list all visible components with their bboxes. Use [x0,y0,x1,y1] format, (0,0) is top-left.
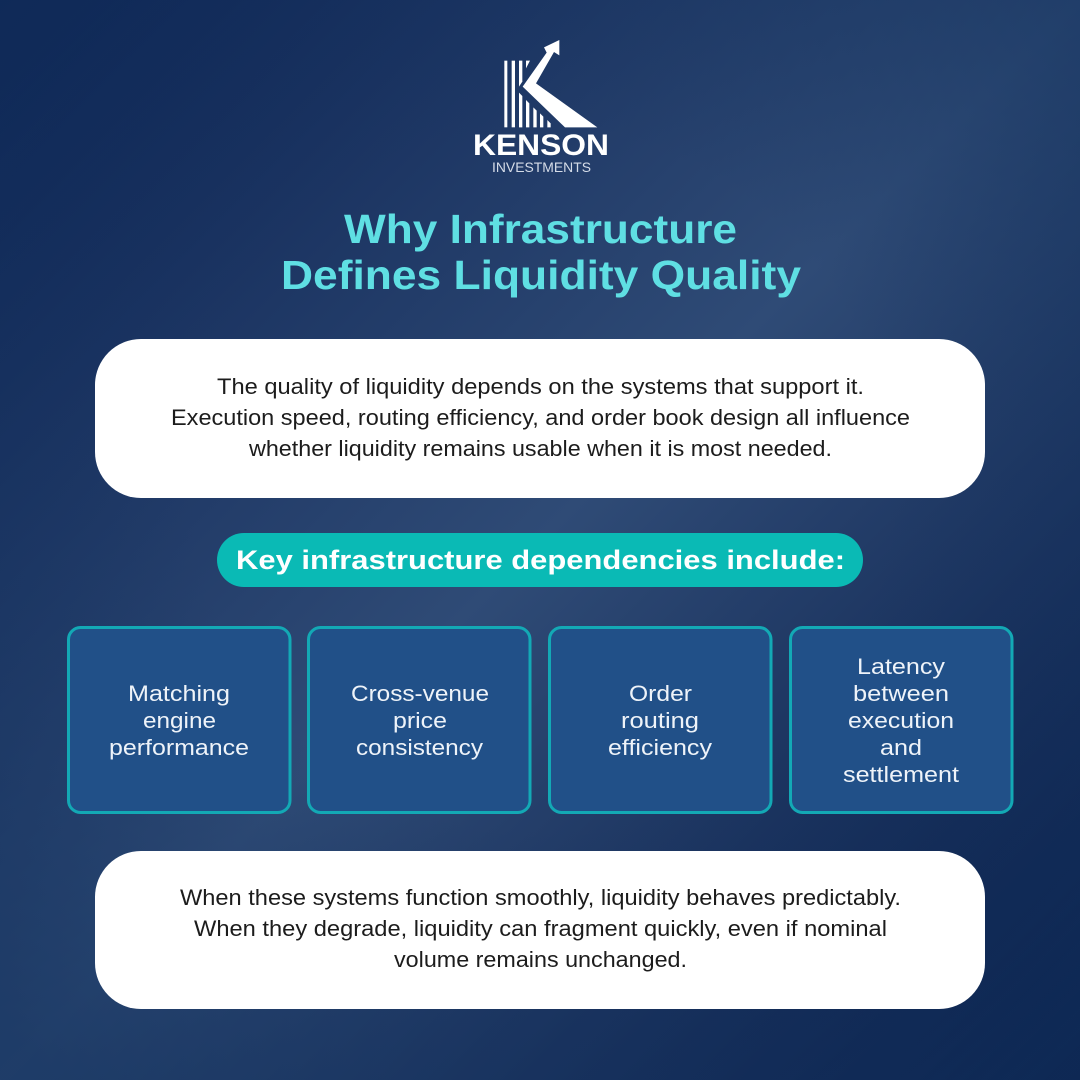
card: order routing efficiency: Order [629,681,693,706]
card: latency between execution and settlement: settlement [843,762,960,787]
panel: closing text: volume remains unchanged. [394,947,687,972]
logo: Kenson Investments [473,40,609,175]
card: latency between execution and settlement: Latency [857,654,946,679]
title [281,206,802,298]
card: matching engine performance [68,628,290,812]
card: matching engine performance: performance [109,735,249,760]
card: latency between execution and settlement: and [880,735,922,760]
panel: closing text: When these systems function smoothly, liquidity behaves predictably. [180,885,901,910]
card: matching engine performance: engine [143,708,216,733]
title: Defines Liquidity Quality [281,252,802,298]
card: order routing efficiency: routing [621,708,699,733]
panel: closing text [95,851,985,1009]
icon: K with rising arrow and bars [504,40,597,127]
title: Why Infrastructure [344,206,737,252]
card: latency between execution and settlement: between [853,681,949,706]
card: cross-venue price consistency [308,628,530,812]
panel: closing text: When they degrade, liquidity can fragment quickly, even if nominal [194,916,887,941]
heading pill: key dependencies [217,533,863,587]
card: latency between execution and settlement: execution [848,708,954,733]
panel: intro text [95,339,985,498]
card: order routing efficiency: efficiency [608,735,713,760]
card: cross-venue price consistency: Cross-venue [351,681,489,706]
heading pill: key dependencies: Key infrastructure dependencies include: [236,545,845,575]
card: cross-venue price consistency: consistency [356,735,484,760]
panel: intro text: The quality of liquidity depends on the systems that support it. [217,374,864,399]
logo subtitle: INVESTMENTS [492,159,591,175]
panel: intro text: whether liquidity remains usable when it is most needed. [248,436,832,461]
card: latency between execution and settlement [790,628,1012,812]
card: cross-venue price consistency: price [393,708,447,733]
card: matching engine performance: Matching [128,681,230,706]
card: order routing efficiency [550,628,771,812]
logo wordmark: KENSON [473,129,609,162]
panel: intro text: Execution speed, routing efficiency, and order book design all influence [171,405,910,430]
